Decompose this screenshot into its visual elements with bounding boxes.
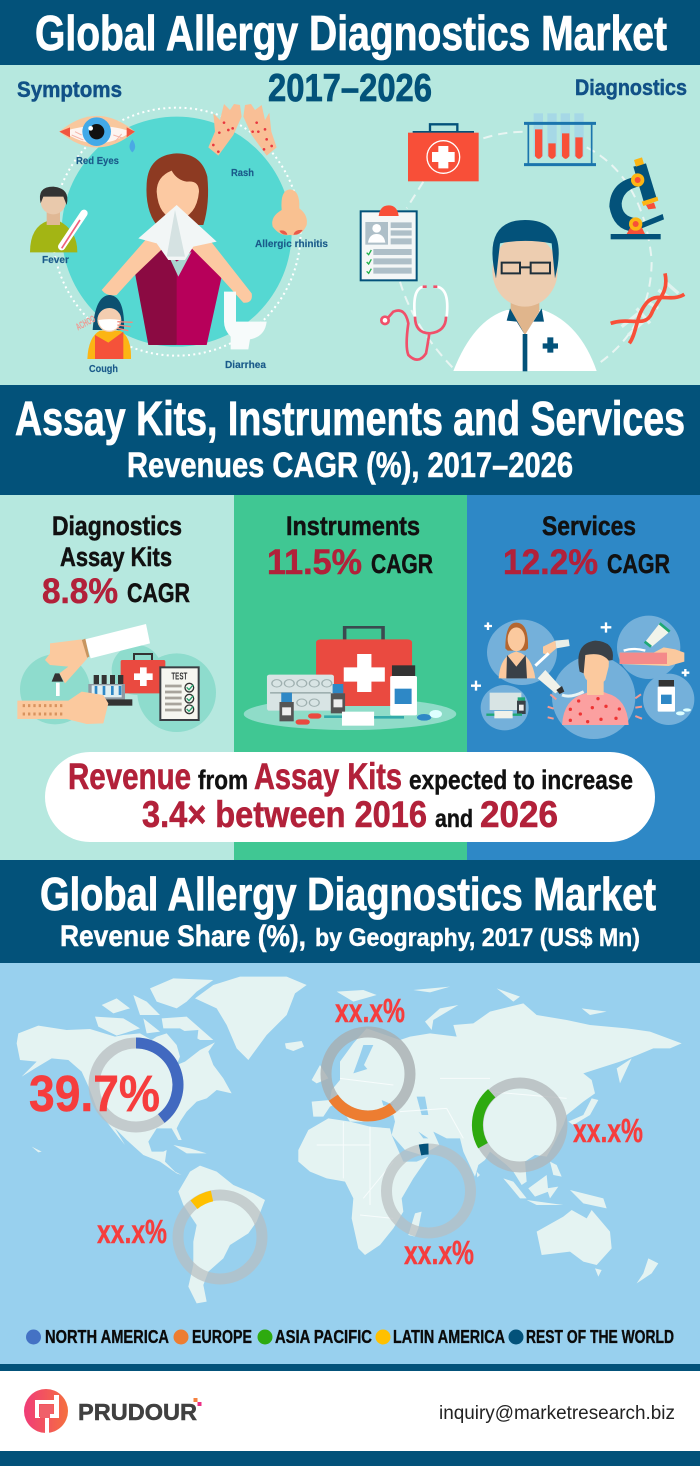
symptom labels: Red Eyes [76, 155, 119, 167]
panel: title band [0, 0, 700, 65]
icon: rash hands [208, 104, 277, 156]
chart: North America ring [94, 1043, 178, 1127]
value: North America: 39.7% [29, 1065, 160, 1122]
symptom labels: Cough [89, 363, 118, 375]
symptom labels: Rash [231, 167, 254, 179]
legend: NORTH AMERICA [45, 1327, 169, 1347]
heading: diagnostics: Diagnostics [575, 75, 687, 100]
chart: rest of the world ring [386, 1149, 470, 1233]
icon: sneezing woman [102, 153, 252, 345]
diagnostics illustration [361, 113, 684, 371]
symptom labels: Fever [42, 254, 69, 266]
chart: Europe ring [326, 1032, 410, 1116]
icon: microscope [609, 157, 664, 239]
value: Europe: xx.x% [335, 992, 405, 1029]
icon: assay test: TEST [171, 672, 187, 683]
panel: assay kits heading band [0, 385, 700, 495]
subheading: revenue share: Revenue Share (%), [60, 920, 306, 953]
callout: revenue: and [435, 805, 473, 833]
panel: services [467, 495, 700, 860]
label: diagnostics assay kits: Assay Kits [60, 542, 172, 572]
label: services: Services [542, 511, 636, 541]
subheading: geography: by Geography, 2017 (US$ Mn) [315, 924, 640, 952]
callout: revenue: 3.4× between 2016 [142, 794, 427, 835]
label: diagnostics assay kits: Diagnostics [52, 511, 182, 541]
icon: nose [272, 189, 307, 235]
panel: geography heading band [0, 860, 700, 963]
heading: years: 2017–2026 [268, 67, 432, 110]
value: Latin America: xx.x% [97, 1213, 167, 1250]
icon: clipboard [361, 205, 417, 280]
callout: revenue [45, 752, 655, 842]
panel: symptoms and diagnostics [0, 65, 700, 385]
world map [17, 977, 682, 1303]
callout: revenue: Revenue [68, 756, 191, 797]
contact email: inquiry@marketresearch.biz [439, 1403, 675, 1424]
symptoms illustration [30, 104, 307, 359]
icon: doctor [453, 220, 597, 371]
legend: LATIN AMERICA [393, 1327, 505, 1347]
legend: EUROPE [192, 1327, 252, 1347]
icon: first aid case [408, 124, 479, 181]
label: instruments: Instruments [286, 511, 420, 541]
label: services: CAGR [607, 549, 670, 579]
label: services: 12.2% [503, 543, 598, 582]
chart: Latin America ring [178, 1195, 262, 1279]
label: diagnostics assay kits: CAGR [127, 578, 190, 608]
icon: Prudour logo [24, 1389, 68, 1433]
logo text: PRUDOUR [78, 1399, 197, 1425]
icon: test tubes [524, 113, 596, 165]
value: rest of the world: xx.x% [404, 1234, 474, 1271]
callout: revenue: expected to increase [409, 765, 633, 795]
panel: instruments [234, 495, 467, 860]
panel: world map [0, 963, 700, 1364]
subheading: CAGR: Revenues CAGR (%), 2017–2026 [127, 446, 573, 485]
label: services [503, 511, 670, 582]
icon: coughing girl [74, 295, 133, 359]
symptom labels [42, 155, 328, 375]
panel: footer [0, 1364, 700, 1466]
label: instruments: 11.5% [267, 543, 362, 582]
label: instruments [267, 511, 433, 582]
callout: revenue: from [198, 765, 248, 795]
label: diagnostics assay kits: 8.8% [42, 572, 118, 611]
legend: ASIA PACIFIC [275, 1327, 372, 1347]
callout: revenue: Assay Kits [254, 756, 402, 797]
icon: toilet [224, 292, 267, 349]
legend [26, 1327, 674, 1347]
callout: revenue: 2026 [480, 794, 558, 835]
heading: symptoms: Symptoms [17, 77, 122, 102]
icon: DNA [611, 273, 684, 343]
panel: diagnostics assay kits [0, 495, 234, 860]
value: Asia Pacific: xx.x% [573, 1112, 643, 1149]
icon: coughing girl: ACHOO [74, 314, 98, 333]
icon: assay test [17, 624, 216, 732]
icon: services people [471, 616, 694, 739]
icon: stethoscope [381, 287, 447, 360]
icon: instruments kit [244, 627, 456, 730]
icon: red eye [59, 116, 135, 152]
chart: Asia Pacific ring [477, 1083, 562, 1167]
icon: fever boy [30, 187, 84, 252]
label: diagnostics assay kits [42, 511, 190, 611]
symptom labels: Diarrhea [225, 359, 266, 371]
symptom labels: Allergic rhinitis [255, 238, 328, 250]
label: instruments: CAGR [371, 549, 433, 579]
